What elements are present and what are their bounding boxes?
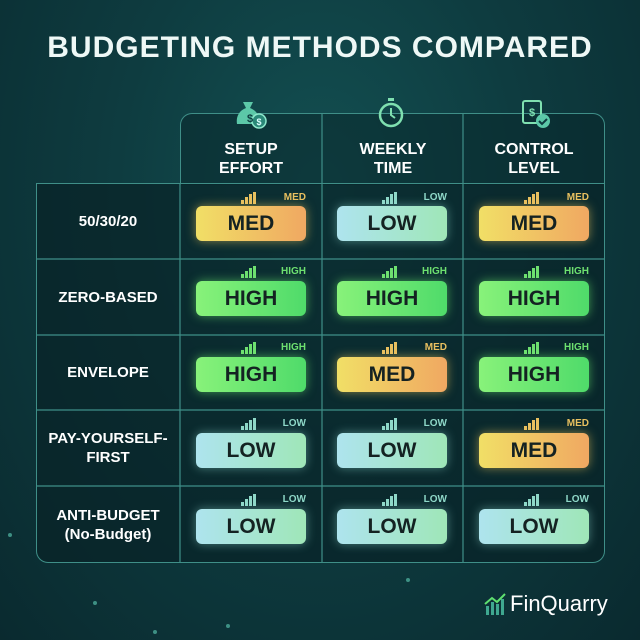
pill r4c2: LOW [368, 439, 416, 462]
pill r5c1 [196, 509, 306, 544]
tag r2c2: HIGH [422, 266, 447, 277]
pill r3c3 [479, 357, 589, 392]
pill r1c2: LOW [368, 212, 416, 235]
pill r4c3: MED [511, 439, 557, 462]
tag r3c2 [382, 342, 447, 354]
pill r2c1: HIGH [225, 287, 277, 310]
tag r5c1 [241, 494, 306, 506]
tag r4c1 [241, 418, 306, 430]
icon: clipboard check [522, 100, 550, 128]
tag r4c2: LOW [424, 418, 447, 429]
tag r4c3: MED [567, 418, 589, 429]
pill r3c2 [337, 357, 447, 392]
pill r2c2: HIGH [366, 287, 418, 310]
header: weekly time [360, 141, 426, 177]
tag r2c2 [382, 266, 447, 278]
pill r2c2 [337, 281, 447, 316]
row label: anti-budget: ANTI-BUDGET [56, 507, 160, 524]
icon: money bag: $ [247, 113, 253, 125]
logo: FinQuarry: FinQuarry [510, 591, 608, 616]
tag r3c2: MED [425, 342, 447, 353]
tag r1c1: MED [284, 192, 306, 203]
header: setup effort: EFFORT [219, 160, 283, 177]
icon: stopwatch [378, 98, 404, 128]
title: BUDGETING METHODS COMPARED [47, 31, 593, 64]
row label: 50/30/20: 50/30/20 [79, 213, 137, 230]
row label: zero-based: ZERO-BASED [58, 289, 158, 306]
tag r5c3: LOW [566, 494, 589, 505]
pill r2c3 [479, 281, 589, 316]
tag r5c3 [524, 494, 589, 506]
pill r2c1 [196, 281, 306, 316]
header: control level [494, 141, 574, 177]
tag r3c3: HIGH [564, 342, 589, 353]
pill r1c3: MED [511, 212, 557, 235]
tag r5c2 [382, 494, 447, 506]
icon: money bag [236, 102, 267, 129]
header panel [180, 113, 605, 185]
header: control level: LEVEL [508, 160, 560, 177]
tag r4c1: LOW [283, 418, 306, 429]
pill r5c2: LOW [368, 515, 416, 538]
tag r1c1 [241, 192, 306, 204]
pill r3c1: HIGH [225, 363, 277, 386]
pill r1c1 [196, 206, 306, 241]
icon: chart arrow [484, 593, 506, 615]
pill r5c1: LOW [226, 515, 275, 538]
header: control level: CONTROL [494, 141, 574, 158]
header: weekly time: WEEKLY [360, 141, 426, 158]
pill r5c3: LOW [510, 515, 558, 538]
tag r2c1 [241, 266, 306, 278]
tag r1c3 [524, 192, 589, 204]
row label: pay-yourself-first [48, 430, 168, 466]
tag r3c3 [524, 342, 589, 354]
header: setup effort [219, 141, 283, 177]
pill r1c1: MED [228, 212, 274, 235]
pill r4c2 [337, 433, 447, 468]
pill r1c2 [337, 206, 447, 241]
tag r3c1: HIGH [281, 342, 306, 353]
tag r1c2 [382, 192, 447, 204]
pill r4c3 [479, 433, 589, 468]
pill r5c3 [479, 509, 589, 544]
tag r2c3 [524, 266, 589, 278]
pill r2c3: HIGH [508, 287, 560, 310]
pill r5c2 [337, 509, 447, 544]
row label: pay-yourself-first: PAY-YOURSELF- [48, 430, 168, 447]
header: weekly time: TIME [374, 160, 412, 177]
icon: money bag: $ [256, 117, 262, 127]
pill r4c1 [196, 433, 306, 468]
table panel [36, 183, 605, 563]
icon: clipboard check: $ [529, 107, 535, 119]
pill r1c3 [479, 206, 589, 241]
pill r3c1 [196, 357, 306, 392]
tag r4c2 [382, 418, 447, 430]
row label: envelope: ENVELOPE [67, 364, 149, 381]
row label: pay-yourself-first: FIRST [86, 449, 130, 466]
tag r1c2: LOW [424, 192, 447, 203]
pill r3c3: HIGH [508, 363, 560, 386]
tag r2c3: HIGH [564, 266, 589, 277]
row label: anti-budget: (No-Budget) [65, 526, 151, 543]
pill r3c2: MED [369, 363, 415, 386]
tag r5c2: LOW [424, 494, 447, 505]
header: setup effort: SETUP [224, 141, 278, 158]
pill r4c1: LOW [226, 439, 275, 462]
tag r1c3: MED [567, 192, 589, 203]
tag r3c1 [241, 342, 306, 354]
tag r5c1: LOW [283, 494, 306, 505]
row label: anti-budget [56, 507, 160, 543]
tag r4c3 [524, 418, 589, 430]
tag r2c1: HIGH [281, 266, 306, 277]
